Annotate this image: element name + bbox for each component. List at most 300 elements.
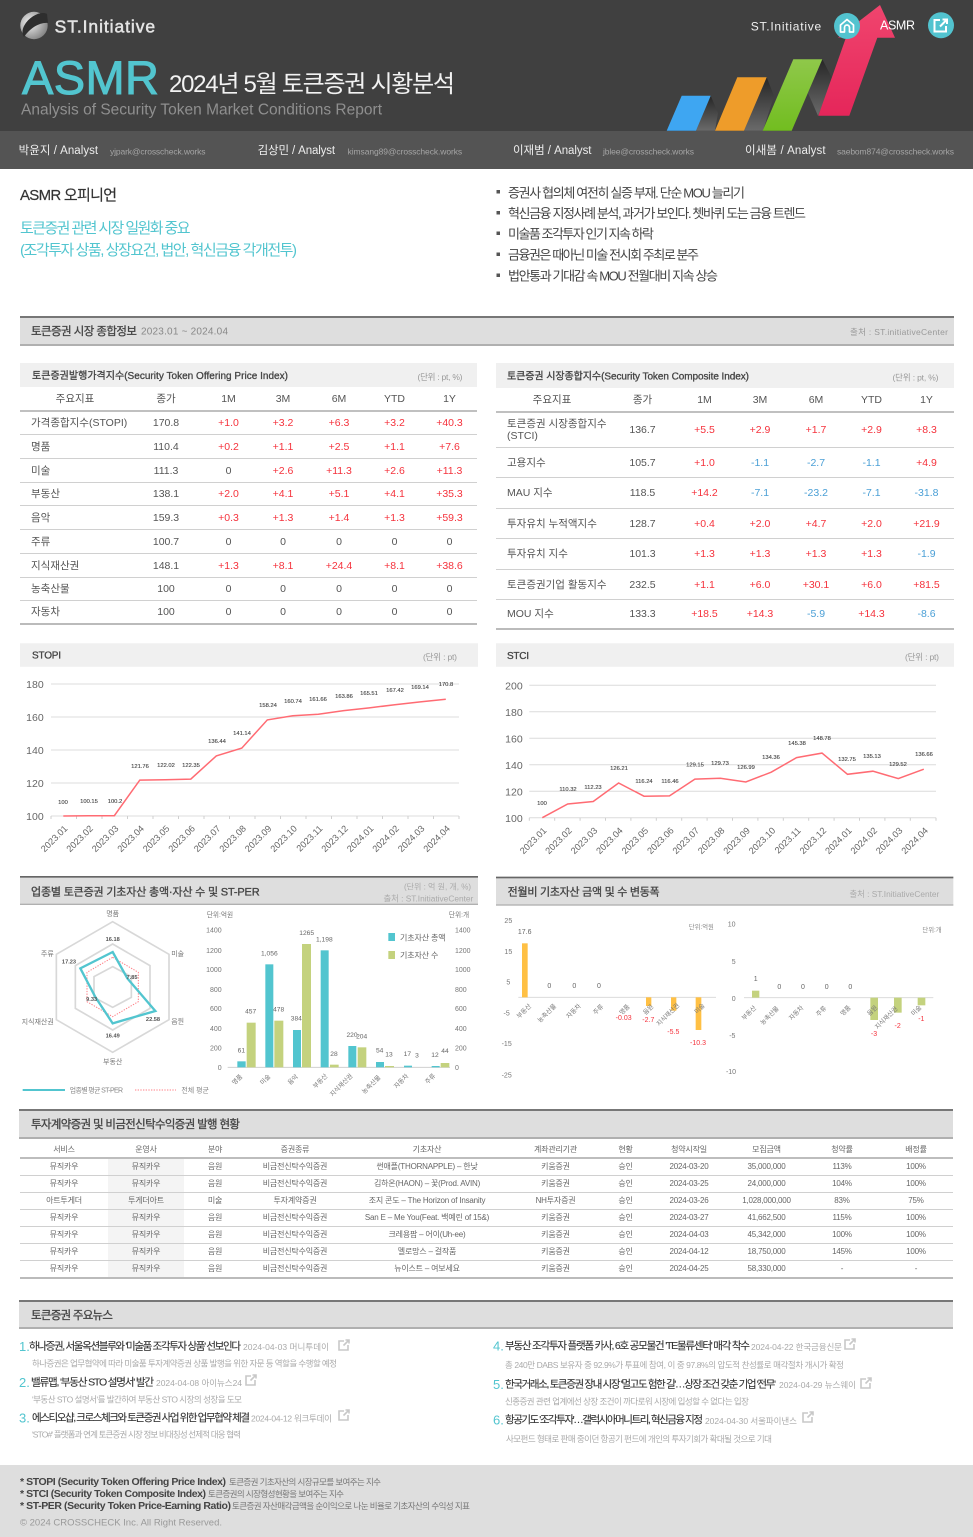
x axis labels: 2024.01	[345, 823, 376, 854]
data table: 159.3	[153, 512, 179, 524]
chart: asset bars: 0	[455, 1065, 459, 1072]
data table: 0	[336, 606, 342, 618]
news 3: 에스티오샵, 크로스체크와 토큰증권 사업 위한 업무협약 체결	[32, 1411, 250, 1424]
data table: 3M	[753, 394, 767, 406]
analyst: 박윤지	[19, 144, 205, 157]
data table: +1.3	[861, 548, 882, 560]
x axis labels: 2023.04	[594, 825, 625, 856]
data table: +14.3	[858, 608, 885, 620]
data table: +6.0	[861, 578, 882, 590]
chart: asset bars: 400	[455, 1026, 467, 1033]
data table: 24,000,000	[747, 1179, 786, 1188]
data labels: 100	[537, 801, 547, 807]
analyst: 이재범: jblee@crosscheck.works	[602, 146, 694, 156]
data labels: 129.73	[711, 761, 729, 767]
title: Analysis of Security Token Market Conditions Report	[21, 101, 383, 118]
chart: asset bars: 부동산	[311, 1071, 329, 1090]
list: opinion bullets: 법안통과 기대감 속 MOU 전월대비 지속 상승	[508, 268, 718, 283]
chart: asset bars: 12	[431, 1052, 439, 1059]
data table: +1.1	[694, 578, 715, 590]
x axis labels: 2024.04	[421, 823, 452, 854]
x axis labels: 2023.03	[569, 825, 599, 856]
news 6: 6.	[493, 1413, 504, 1428]
news 4: 총 240만 DABS 보유자 중 92.9%가 투표에 참여, 이 중 97.8%의 압도적 찬성률로 매각절차 개시가 확정	[505, 1360, 844, 1370]
x axis labels: 2024.04	[899, 825, 930, 856]
data table: 6M	[809, 394, 823, 406]
data table: 100%	[906, 1230, 926, 1239]
x axis labels: 2023.08	[696, 825, 727, 856]
data table: 41,662,500	[747, 1213, 786, 1222]
data labels: 163.86	[335, 694, 353, 700]
bar legend	[388, 932, 446, 960]
chart: asset bars: 457	[245, 1008, 257, 1016]
analyst band	[0, 131, 973, 169]
x axis labels: 2024.03	[874, 825, 905, 856]
chart: asset bars: 명품	[230, 1072, 244, 1087]
chart: asset bars: 1200	[206, 948, 222, 955]
data table: 148.1	[153, 560, 179, 572]
data table: 170.8	[153, 417, 179, 429]
data table: 승인	[618, 1179, 633, 1188]
chart: count change: 명품	[838, 1003, 853, 1018]
chart: asset bars: 204	[356, 1034, 368, 1040]
data table: +1.7	[806, 424, 826, 436]
data table: +1.0	[218, 417, 239, 429]
data labels: 165.51	[360, 691, 378, 697]
chart: radar ST-PER: 미술	[171, 949, 185, 958]
y axis labels: 180	[26, 679, 44, 691]
news 3: 2024-04-12 워크투데이	[251, 1414, 332, 1424]
copyright: © 2024 CROSSCHECK Inc. All Right Reserved.	[20, 1517, 222, 1528]
data table: +4.7	[806, 518, 826, 530]
data table: +11.3	[326, 464, 352, 476]
data table: 승인	[618, 1230, 633, 1239]
panel heading: 출처 : ST.InitiativeCenter	[849, 889, 940, 899]
x axis labels: 2023.08	[217, 823, 248, 854]
chart: asset bars: 220	[346, 1032, 358, 1039]
data table: 1,028,000,000	[742, 1196, 791, 1205]
chart: asset bars: 384	[291, 1016, 302, 1022]
data table: 계좌관리기관	[534, 1144, 577, 1154]
data table: 토큰증권 시장종합지수	[507, 418, 607, 430]
x axis labels: 2023.09	[243, 823, 274, 854]
chart: asset bars: 400	[210, 1026, 222, 1033]
chart: radar ST-PER: 9.33	[86, 997, 97, 1003]
data labels: 112.23	[584, 785, 602, 791]
data table: 종가	[156, 393, 176, 405]
data table: 조지 콘도 – The Horizon of Insanity	[369, 1196, 485, 1205]
data table: 뮤직카우	[132, 1179, 160, 1188]
data table: -7.1	[862, 487, 881, 499]
heading: ASMR 오피니언: ASMR 오피니언	[20, 187, 117, 204]
data table: 투자계약증권	[274, 1196, 316, 1205]
data table: 자동차	[31, 606, 60, 618]
data table: 토큰증권기업 활동지수	[507, 578, 607, 590]
data table: +40.3	[436, 417, 463, 429]
y axis labels: 120	[26, 778, 44, 790]
y axis labels	[26, 679, 44, 823]
link: ST.Initiative home: ST.Initiative	[751, 19, 822, 33]
chart: asset bars: 단위:개	[449, 910, 469, 919]
data table: 2024-03-20	[670, 1162, 708, 1171]
chart: count change: -2	[895, 1023, 901, 1030]
data table: 2024-04-03	[670, 1230, 708, 1239]
title	[21, 51, 455, 118]
data table: YTD	[861, 394, 882, 406]
data table: 100%	[906, 1247, 926, 1256]
data labels: 122.35	[182, 763, 200, 769]
data table: 운영사	[135, 1144, 157, 1154]
data table: 키움증권	[541, 1247, 570, 1256]
x axis labels: 2023.07	[192, 823, 223, 854]
data table: 음원	[208, 1179, 222, 1188]
chart: radar ST-PER	[22, 909, 185, 1066]
chart: count change: -3	[871, 1031, 877, 1038]
chart: asset bars: 미술	[258, 1072, 272, 1087]
chart: radar ST-PER: 16.18	[106, 937, 120, 943]
unit: (단위 : pt)	[423, 652, 457, 662]
data table: 가격종합지수(STOPI)	[31, 417, 127, 429]
data table: +59.3	[436, 512, 463, 524]
data table: 뮤직카우	[132, 1230, 160, 1239]
chart: radar ST-PER: 17.23	[62, 960, 76, 966]
data labels: 158.24	[259, 703, 278, 709]
list: opinion bullets	[496, 185, 806, 283]
chart: asset bars: 28	[330, 1051, 338, 1058]
icon: rising arrows graphic	[666, 5, 895, 131]
chart: asset bars: 44	[441, 1048, 449, 1055]
data table: +0.3	[218, 512, 239, 524]
data table: 주요지표	[56, 393, 94, 405]
news 2: 2024-04-08 아이뉴스24	[156, 1378, 242, 1388]
data table: 모집금액	[752, 1144, 781, 1154]
chart: count change: 미술	[909, 1003, 923, 1018]
data table: +0.4	[694, 518, 715, 530]
news 4: 2024-04-22 한국금융신문	[751, 1342, 842, 1352]
data table: -	[915, 1264, 917, 1273]
data table: +1.0	[694, 456, 715, 468]
data table: YTD	[384, 393, 405, 405]
x axis labels: 2023.01	[39, 823, 70, 854]
y axis labels: 120	[505, 786, 523, 798]
data table: 서비스	[53, 1144, 75, 1154]
data table: -1.9	[917, 548, 936, 560]
x axis labels: 2023.10	[747, 825, 777, 856]
panel: token securities news	[19, 1300, 953, 1444]
news 2: 밸류맵, '부동산 STO 설명서' 발간	[31, 1376, 154, 1388]
x axis labels: 2023.11	[294, 823, 325, 854]
table heading	[496, 363, 954, 388]
data labels: 126.21	[610, 766, 628, 772]
data table: 2024-03-27	[670, 1213, 708, 1222]
data table: 썬애플(THORNAPPLE) – 한낮	[376, 1162, 478, 1171]
bar legend: 기초자산 수	[400, 950, 438, 960]
x axis labels: 2023.05	[141, 823, 172, 854]
chart: amount change: 17.6	[518, 929, 532, 936]
radar legend: 전체 평균	[181, 1086, 210, 1094]
section heading	[19, 1109, 953, 1139]
data table: 115%	[832, 1213, 852, 1222]
data table: 35,000,000	[747, 1162, 786, 1171]
chart: amount change: 15	[504, 949, 512, 956]
footer notes	[0, 1465, 973, 1537]
chart: count change: 0	[777, 984, 781, 991]
x axis labels	[518, 825, 930, 856]
data table: MOU 지수	[507, 608, 554, 620]
chart: count change: 0	[801, 984, 805, 991]
x axis labels: 2023.02	[64, 823, 95, 854]
data table: +1.3	[273, 512, 293, 524]
data labels: 122.02	[157, 763, 175, 769]
news 2: 2.	[19, 1375, 30, 1390]
opinion text	[20, 220, 297, 259]
y axis labels: 100	[26, 811, 44, 823]
data table: 키움증권	[541, 1179, 570, 1188]
data table: +7.6	[439, 440, 460, 452]
chart: count change: 단위:개	[922, 925, 942, 934]
x axis labels: 2023.04	[115, 823, 146, 854]
x axis labels: 2023.12	[798, 825, 828, 856]
data table: MAU 지수	[507, 487, 553, 499]
data table: +2.9	[861, 424, 882, 436]
panel heading: 출처 : ST.InitiativeCenter	[383, 894, 474, 904]
data table: 분야	[208, 1144, 222, 1154]
note: ST-PER: * ST-PER (Security Token Price-Earning Ratio)	[20, 1500, 231, 1512]
note: STCI: * STCI (Security Token Composite Index)	[20, 1488, 206, 1500]
data table: 0	[280, 583, 286, 595]
chart: count change: 5	[732, 959, 736, 966]
chart: amount change: 0	[547, 983, 551, 990]
data table: 키움증권	[541, 1230, 570, 1239]
STCI line	[542, 753, 924, 818]
data table: 0	[226, 464, 231, 476]
x axis labels: 2024.02	[370, 823, 401, 854]
list: opinion bullets: 증권사 협의체 여전히 실증 부재. 단순 MOU 늘리기	[508, 185, 745, 200]
bar legend: 기초자산 총액	[400, 932, 446, 942]
data labels: 100.15	[80, 799, 98, 805]
chart: count change: 10	[728, 922, 736, 928]
data table: 키움증권	[541, 1162, 570, 1171]
data table: 음원	[208, 1247, 222, 1256]
data table: 104%	[832, 1179, 852, 1188]
data labels: 136.66	[915, 752, 933, 758]
data table: +3.2	[384, 417, 405, 429]
chart: count change: 음원	[865, 1003, 879, 1018]
x axis labels: 2023.01	[518, 825, 549, 856]
data table: 2024-03-26	[670, 1196, 708, 1205]
data table: 45,342,000	[747, 1230, 786, 1239]
data table: 100.7	[153, 536, 179, 548]
data table: 배정률	[905, 1144, 927, 1154]
chart: asset bars: 1400	[455, 928, 471, 934]
data table: 청약률	[831, 1144, 853, 1154]
data table: 김하온(HAON) – 꽃(Prod. AVIN)	[374, 1179, 480, 1188]
chart: asset bars: 61	[238, 1048, 245, 1054]
chart: amount change: 0	[597, 983, 601, 990]
chart: asset bars: 단위:억원	[207, 910, 233, 919]
table heading: (단위 : pt, %)	[892, 372, 939, 382]
data table: 키움증권	[541, 1213, 570, 1222]
panel heading	[496, 877, 953, 906]
data labels: 100	[58, 800, 68, 806]
y axis labels: 200	[505, 680, 523, 692]
x axis labels: 2023.09	[721, 825, 752, 856]
analyst: 이재범: 이재범 / Analyst	[513, 144, 592, 157]
data table: 뮤직카우	[50, 1162, 78, 1171]
data table: +21.9	[913, 518, 940, 530]
chart: radar ST-PER: 7.85	[126, 975, 138, 981]
data labels: 135.13	[863, 754, 881, 760]
logo: ST.Initiative: ST.Initiative	[55, 16, 155, 36]
data table: +5.1	[329, 488, 349, 500]
x axis labels: 2024.03	[396, 823, 427, 854]
data table: +2.6	[384, 464, 405, 476]
data table: 1M	[221, 393, 236, 405]
news 4: 부동산 조각투자 플랫폼 카사, 6호 공모물건 'TE물류센터' 매각 착수	[505, 1340, 750, 1352]
data table: 승인	[618, 1264, 633, 1273]
x axis labels: 2023.12	[319, 823, 350, 854]
data table: 승인	[618, 1162, 633, 1171]
chart: count change	[726, 922, 942, 1076]
title: ASMR	[22, 51, 159, 104]
x axis labels: 2023.10	[268, 823, 299, 854]
data labels: 129.52	[889, 762, 907, 768]
news 6	[493, 1412, 813, 1444]
panel: monthly change charts	[496, 876, 954, 1080]
data labels: 148.78	[813, 736, 831, 742]
x axis labels: 2023.05	[620, 825, 650, 856]
data table: 지식재산권	[31, 560, 79, 572]
data table: +1.3	[218, 560, 239, 572]
chart: amount change: 단위:억원	[689, 922, 714, 931]
news 1: 2024-04-03 머니투데이	[243, 1342, 329, 1352]
chart: amount change	[502, 918, 716, 1080]
data table: 비금전신탁수익증권	[263, 1247, 327, 1256]
data table: 1Y	[443, 393, 456, 405]
panel heading: (단위 : 억 원, 개, %)	[404, 882, 471, 892]
y axis labels: 100	[505, 813, 523, 825]
chart: asset bars: 600	[210, 1006, 222, 1013]
data table: +2.0	[861, 518, 882, 530]
chart: count change: 농축산물	[758, 1004, 781, 1027]
panel heading	[20, 876, 478, 905]
data table: 232.5	[629, 578, 656, 590]
data table: -1.1	[862, 456, 881, 468]
data table: 0	[336, 583, 342, 595]
data table: 113%	[832, 1162, 852, 1171]
data table: 83%	[834, 1196, 850, 1205]
chart: asset bars: 1,198	[316, 936, 333, 944]
chart: radar ST-PER: 16.49	[106, 1034, 120, 1040]
data table: 뮤직카우	[50, 1230, 78, 1239]
table heading	[20, 363, 477, 387]
chart: asset bars: 1400	[206, 928, 222, 934]
chart: radar ST-PER: 명품	[106, 909, 120, 918]
data table: 키움증권	[541, 1264, 570, 1273]
data table: 133.3	[629, 608, 656, 620]
y axis labels: 160	[505, 733, 523, 745]
chart: asset bars: 1200	[455, 948, 471, 955]
data table: 음원	[208, 1162, 222, 1171]
data table: +30.1	[803, 578, 829, 590]
link: ASMR external: ASMR	[880, 18, 915, 32]
chart: amount change: -5	[504, 1010, 510, 1018]
data labels: 110.32	[559, 787, 577, 793]
analyst: 이새봄	[745, 144, 954, 157]
data labels	[537, 736, 933, 807]
chart: radar ST-PER: 22.58	[146, 1017, 160, 1023]
news 6: 항공기도 '조각투자'…갤럭시아머니트리, 혁신금융 지정	[505, 1414, 703, 1426]
analyst: 김상민: 김상민 / Analyst	[258, 144, 336, 157]
data table: -23.2	[804, 487, 828, 499]
data labels: 132.75	[838, 757, 856, 763]
data table: 뮤직카우	[132, 1247, 160, 1256]
chart: asset bars: 0	[218, 1065, 222, 1072]
data table: 아트투게더	[46, 1196, 82, 1205]
data table: 미술	[31, 464, 50, 476]
chart: asset bars: 17	[404, 1051, 411, 1058]
chart: amount change: 25	[504, 918, 512, 925]
chart: count change: -1	[918, 1016, 925, 1023]
data table: 0	[447, 536, 452, 548]
chart: asset bars: 지식재산권	[327, 1071, 355, 1098]
x axis labels: 2024.01	[823, 825, 854, 856]
news 6: 사모펀드 형태로 판매 중이던 항공기 펀드에 개인의 투자기회가 확대될 것으로 기대	[506, 1434, 772, 1444]
chart: amount change: -10.3	[690, 1040, 706, 1047]
data table: 승인	[618, 1213, 633, 1222]
x axis labels	[39, 823, 452, 854]
STOPI line	[63, 699, 446, 816]
chart: asset bars: 3	[415, 1052, 419, 1060]
panel: STOPI table	[20, 363, 477, 625]
news 4: 4.	[493, 1339, 504, 1354]
data table: +14.2	[691, 487, 718, 499]
data table: 크레용팝 – 어이(Uh-ee)	[388, 1230, 465, 1239]
link: ASMR external	[880, 12, 954, 38]
data table: +1.3	[384, 512, 405, 524]
chart: count change: 1	[754, 976, 758, 983]
note: STCI: 토큰증권의 시장형성현황을 보여주는 지수	[208, 1489, 344, 1499]
chart: count change: 자동차	[787, 1003, 805, 1022]
news 5: 2024-04-29 뉴스웨이	[779, 1380, 856, 1390]
data table: 105.7	[629, 456, 656, 468]
chart: amount change: -2.7	[642, 1017, 654, 1024]
data table: 뮤직카우	[132, 1162, 160, 1171]
data table: 100%	[906, 1179, 926, 1188]
data table: 멜로망스 – 걸작품	[398, 1247, 456, 1256]
data table	[20, 393, 477, 625]
data table: 비금전신탁수익증권	[263, 1213, 327, 1222]
x axis labels: 2023.02	[543, 825, 574, 856]
chart: asset bars: 1000	[455, 967, 471, 974]
analyst: 이재범	[513, 144, 694, 157]
x axis labels: 2023.03	[90, 823, 121, 854]
data table: 0	[280, 606, 286, 618]
data table: 비금전신탁수익증권	[263, 1162, 327, 1171]
data table: 3M	[276, 393, 290, 405]
data table: 뉴이스트 – 여보세요	[394, 1264, 460, 1273]
list: opinion bullets: 금융권은 때아닌 미술 전시회 주최로 분주	[508, 247, 699, 262]
note: STOPI: * STOPI (Security Token Offering Price Index)	[20, 1476, 226, 1488]
data table: +35.3	[436, 488, 463, 500]
data table: +3.2	[273, 417, 293, 429]
note: ST-PER: 토큰증권 자산매각금액을 순이익으로 나눈 비율로 기초자산의 수익성 지표	[232, 1501, 470, 1511]
data table: -5.9	[807, 608, 825, 620]
data table: 100	[157, 583, 175, 595]
chart: asset bars: 1265	[299, 930, 314, 937]
radar legend	[23, 1086, 210, 1094]
x axis labels: 2023.06	[166, 823, 197, 854]
